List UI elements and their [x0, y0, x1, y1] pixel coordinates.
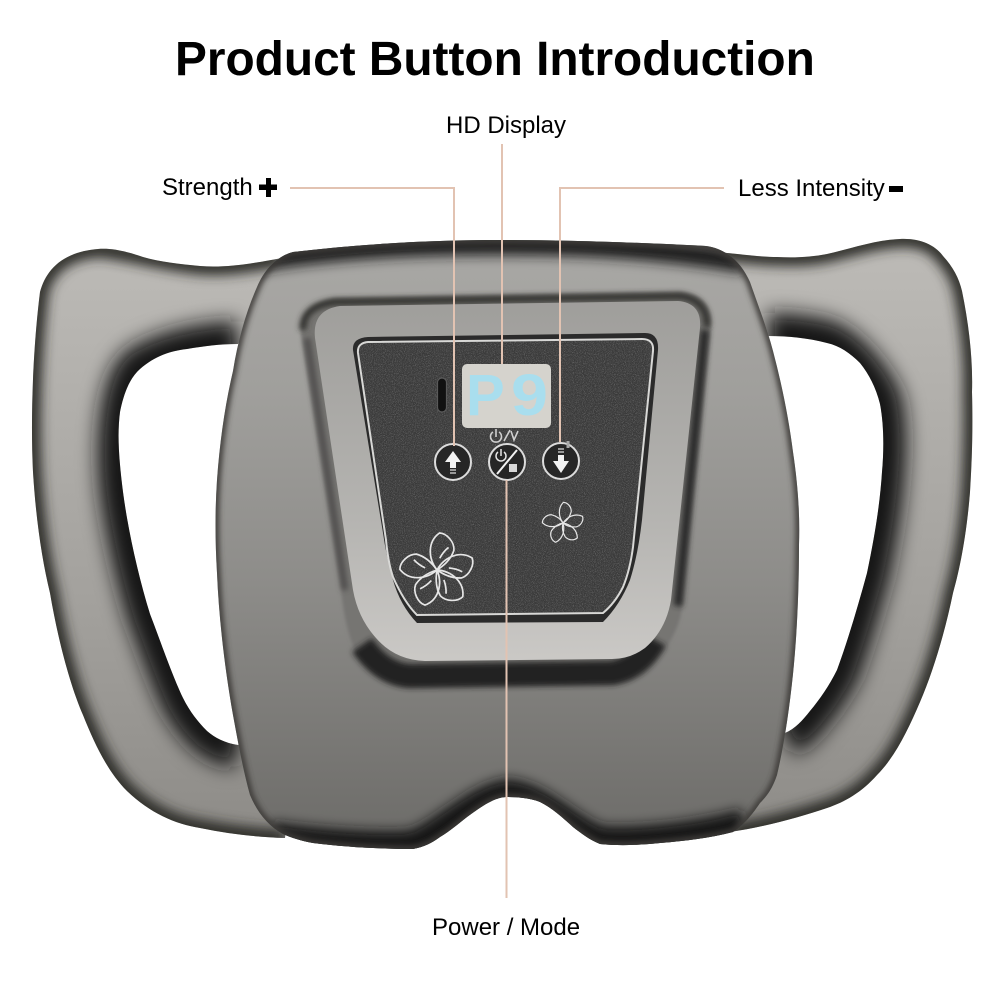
leader line: Strength — [290, 188, 454, 446]
HD display: 9 — [511, 363, 548, 428]
leader line: Power / Mode — [506, 480, 508, 898]
button: intensity down — [543, 441, 579, 479]
icon: large flower — [398, 531, 474, 608]
right handle — [717, 239, 972, 832]
product: massager controller — [32, 239, 972, 849]
HD display: P — [466, 363, 505, 428]
main body — [216, 240, 799, 849]
body top shadow band — [250, 244, 745, 262]
recessed bezel surround — [301, 292, 711, 688]
power mode legend icon — [491, 429, 518, 442]
label: Less Intensity minus: Less Intensity — [738, 175, 885, 202]
left handle — [32, 249, 300, 838]
leader line: Less Intensity — [560, 188, 724, 442]
leader line: HD Display — [501, 144, 503, 364]
light bezel — [315, 301, 700, 661]
icon: small flower — [542, 502, 584, 543]
HD display — [462, 363, 551, 428]
label: Power / Mode: Power / Mode — [432, 914, 580, 941]
label: Strength plus: Strength — [162, 174, 253, 201]
label: HD Display: HD Display — [446, 112, 566, 139]
USB port — [438, 378, 446, 412]
title: Product Button Introduction — [175, 33, 815, 86]
button: power and mode — [489, 444, 525, 480]
body side edge — [216, 240, 799, 849]
control panel — [353, 333, 658, 623]
body bottom shadow band — [270, 795, 745, 847]
button: strength up — [435, 444, 471, 480]
